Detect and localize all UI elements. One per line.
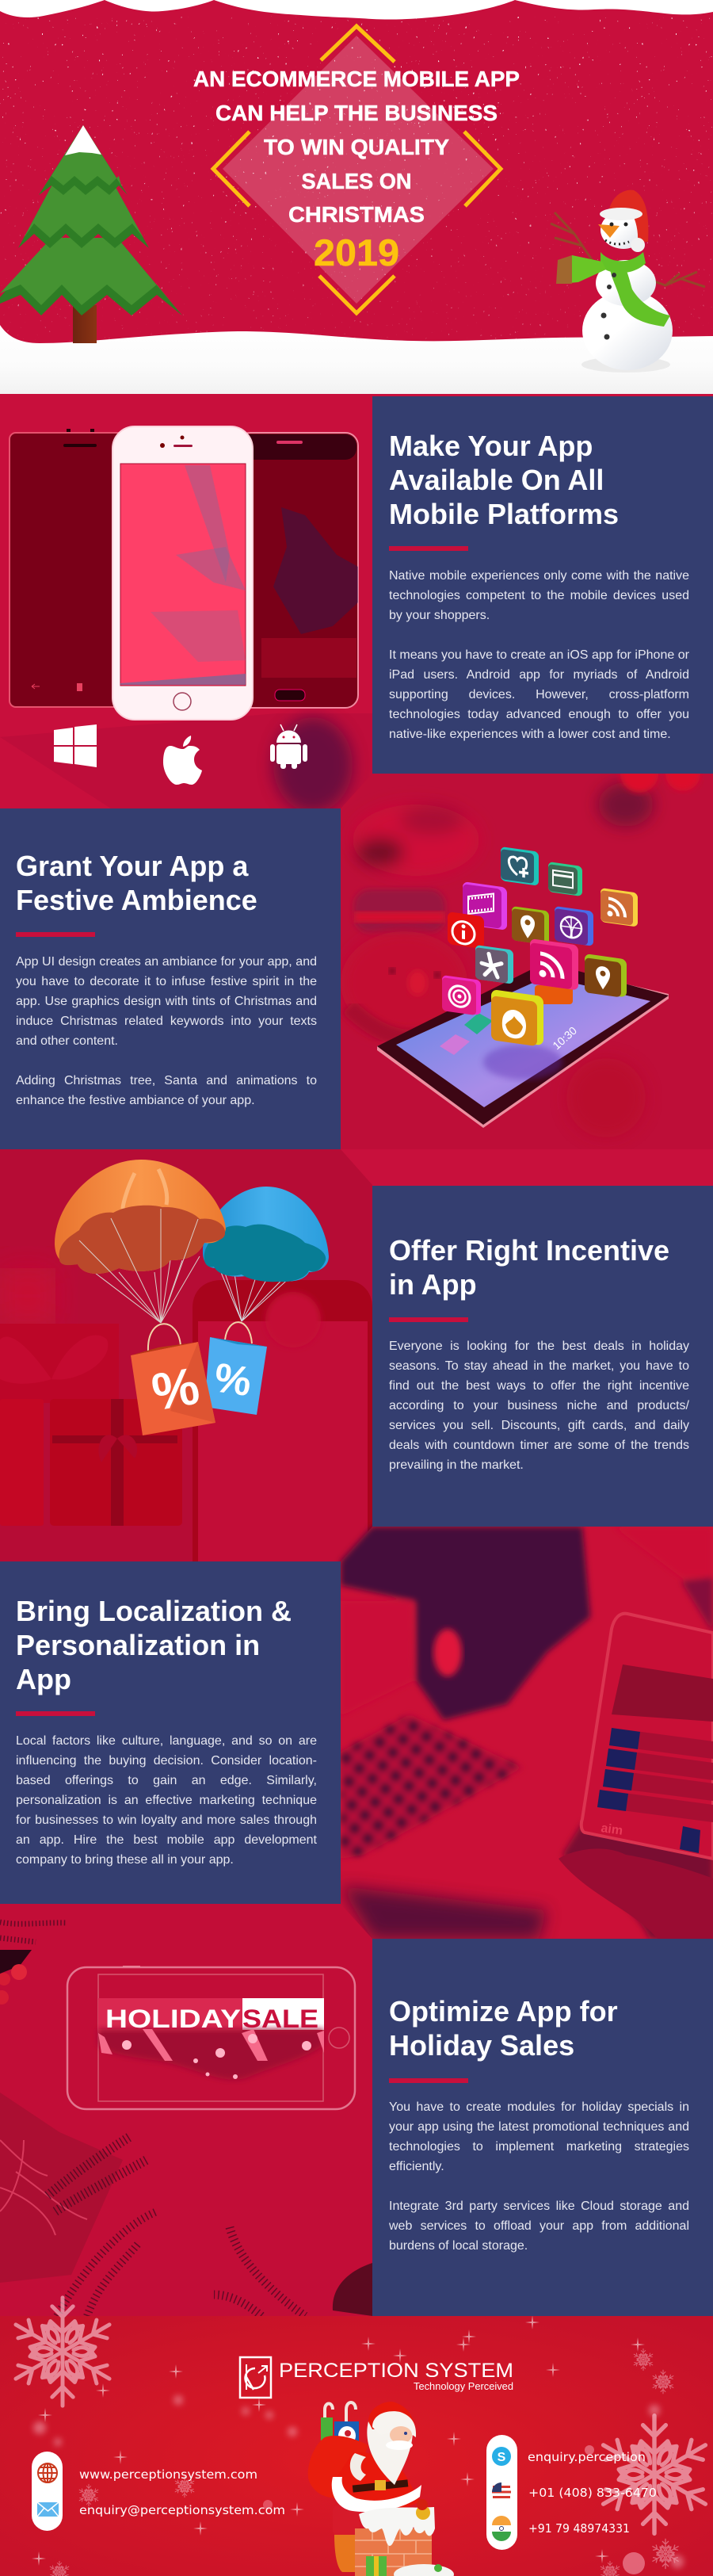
face [390, 2426, 412, 2444]
title: CAN HELP THE BUSINESS [215, 101, 498, 125]
heading: Mobile Platforms [389, 498, 619, 530]
body text: deals with countdown timer are some of the trends [389, 1439, 689, 1452]
snow drift top [0, 0, 713, 20]
icon: snowman [551, 190, 705, 373]
accent bar [16, 932, 95, 937]
body text: You have to create modules for holiday specials in [389, 2100, 689, 2114]
panel: offer right incentive [372, 1186, 713, 1527]
contact text: skype and phones: +01 (408) 833-6470 [528, 2486, 657, 2500]
chimney snow [359, 2507, 435, 2546]
heading: Personalization in [16, 1629, 260, 1661]
background phone [193, 1280, 372, 1561]
title [193, 67, 520, 273]
body text: iPad users. Android app for myriads of Android [389, 668, 689, 682]
body text: Adding Christmas tree, Santa and animations to [16, 1074, 317, 1087]
icon: mountain [491, 989, 543, 1047]
heading: Bring Localization & [16, 1595, 292, 1627]
bottom gift [366, 2556, 387, 2576]
panel: bring localization and personalization [0, 1561, 341, 1904]
icon: snowflake right [595, 2416, 713, 2533]
icon: pin brown [585, 954, 627, 998]
contact text: web and mail [79, 2467, 285, 2517]
contact text: skype and phones [528, 2450, 657, 2536]
tablet: 10:30 [550, 1024, 579, 1052]
leg and boot [333, 2505, 360, 2536]
phone showing holiday sale: SALE [242, 2005, 318, 2033]
shopping bag: blue [204, 1322, 267, 1415]
icon: windows logo [54, 724, 97, 767]
fir branches [0, 1922, 305, 2316]
phone showing holiday sale [67, 1966, 355, 2109]
body text: technologies to implement marketing strategies [389, 2140, 689, 2154]
section 2 image background [341, 755, 713, 1186]
body text: based offerings to gain an edge. Similarly, [16, 1774, 317, 1787]
heading: Available On All [389, 464, 604, 496]
icon: heart [501, 847, 539, 886]
icon: yelp [475, 945, 513, 984]
body text: efficiently. [389, 2160, 444, 2173]
body text: for businesses to win loyalty and more sales through [16, 1814, 317, 1827]
gifts [325, 2402, 356, 2425]
accent bar [389, 2078, 468, 2083]
icon: card [548, 862, 582, 896]
right phone: android [238, 433, 358, 708]
body text: you have to decorate it to infuse festive spirit in the [16, 975, 317, 988]
body text: Local factors like culture, language, and so on are [16, 1734, 317, 1748]
body text: native-like experiences with a lower cost and time. [389, 728, 671, 741]
body text: services you sell. Discounts, gift cards, and daily [389, 1419, 689, 1432]
icon: pin olive [512, 906, 549, 946]
beard [367, 2421, 413, 2485]
parachute: blue [203, 1187, 329, 1321]
body text: burdens of local storage. [389, 2239, 528, 2253]
shopping bag: blue: % [212, 1355, 254, 1405]
accent bar [389, 1317, 468, 1322]
title: SALES ON [301, 169, 412, 193]
contact text: skype and phones: +91 79 48974331 [528, 2521, 630, 2536]
logo: Technology Perceived [414, 2380, 513, 2392]
body text: personalization is an effective marketing technique [16, 1794, 317, 1807]
body text: technologies today advanced enough to offer you [389, 708, 689, 721]
heading: Holiday Sales [389, 2029, 574, 2062]
section 3 image [0, 1149, 713, 1561]
body text: by your shoppers. [389, 609, 490, 622]
heading: App [16, 1663, 71, 1695]
hero background [0, 16, 713, 341]
bell [416, 2505, 430, 2520]
body text [16, 1734, 317, 1867]
body text: seasons. To stay ahead in the market, you have to [389, 1359, 689, 1373]
body text: prevailing in the market. [389, 1458, 524, 1472]
app icons [442, 847, 638, 1047]
heading: Make Your App [389, 430, 593, 462]
logo: PERCEPTION SYSTEM [279, 2360, 513, 2382]
icon: skype: S [498, 2451, 506, 2464]
tablet [377, 962, 669, 1128]
parachute: orange [55, 1160, 226, 1323]
contact text: web and mail: www.perceptionsystem.com [79, 2467, 257, 2482]
icon: mail [37, 2502, 59, 2517]
body text: Integrate 3rd party services like Cloud storage and [389, 2200, 689, 2213]
icon: skype [492, 2447, 511, 2466]
body text: your app using the latest promotional techniques and [389, 2120, 689, 2134]
hat [368, 2402, 415, 2429]
photo: hand holding phone [559, 1614, 713, 1939]
icon: info [448, 912, 484, 949]
body text: influencing the buying decision. Consider location- [16, 1754, 317, 1768]
suit [335, 2452, 420, 2510]
heading: Optimize App for [389, 1995, 618, 2028]
icon: india flag [492, 2516, 511, 2541]
icon: christmas tree [0, 125, 182, 343]
photo: hand holding phone: aim [600, 1821, 623, 1838]
icon: apple logo [163, 736, 202, 785]
snow ground [0, 325, 713, 394]
leaf and berries [0, 1950, 372, 2316]
body text [389, 1340, 689, 1472]
body text: company to bring these all in your app. [16, 1853, 234, 1867]
icon: target [442, 975, 481, 1016]
body text: an app. Hire the best mobile app development [16, 1833, 317, 1847]
contact pill: skype and phones [486, 2435, 517, 2550]
body text [389, 569, 689, 741]
body text: enhance the festive ambiance of your app. [16, 1094, 255, 1107]
icon: android logo [270, 724, 307, 769]
body text: induce Christmas related keywords into your texts [16, 1015, 317, 1028]
icon: snowflake top left [8, 2298, 117, 2406]
phone showing holiday sale: HOLIDAY [105, 2005, 241, 2033]
section 4 image [341, 1527, 713, 1939]
heading [16, 850, 257, 916]
title: TO WIN QUALITY [264, 135, 449, 159]
title: AN ECOMMERCE MOBILE APP [193, 67, 520, 91]
body text [16, 955, 317, 1107]
icon: dribbble [555, 906, 593, 946]
body text: Native mobile experiences only come with the native [389, 569, 689, 583]
small snowflakes [48, 2349, 681, 2576]
body text: according to your business niche and products/ [389, 1399, 689, 1412]
left phone: windows [10, 429, 128, 707]
heading [389, 1234, 669, 1301]
heading [16, 1595, 292, 1695]
accent bar [16, 1711, 95, 1716]
icon: small orange [535, 985, 573, 1004]
contact text: skype and phones: enquiry.perception [528, 2450, 646, 2464]
body text: app. Use graphics design with tints of Christmas and [16, 995, 317, 1008]
accent bar [389, 546, 468, 551]
body text: App UI design creates an ambiance for your app, and [16, 955, 317, 969]
heading: Festive Ambience [16, 884, 257, 916]
panel: make your app available [372, 396, 713, 774]
heading [389, 430, 619, 530]
heading: Offer Right Incentive [389, 1234, 669, 1267]
panel: grant your app a festive ambience [0, 808, 341, 1149]
section 5 image [0, 1904, 372, 2316]
body text: web services to offload your app from additional [389, 2219, 689, 2233]
body text [389, 2100, 689, 2253]
gift boxes [0, 1324, 182, 1526]
illustration: santa on chimney [308, 2402, 454, 2576]
logo [240, 2357, 513, 2398]
contact text: web and mail: enquiry@perceptionsystem.com [79, 2503, 285, 2517]
icon: us flag [492, 2482, 511, 2501]
shopping bag: orange [131, 1324, 215, 1435]
chimney [355, 2528, 432, 2576]
icon: film [463, 881, 507, 931]
shopping bag: orange: % [147, 1356, 204, 1422]
footer background [0, 2315, 713, 2576]
body text: Everyone is looking for the best deals in holiday [389, 1340, 689, 1353]
body text: It means you have to create an iOS app for iPhone or [389, 648, 689, 662]
body text: technologies competent to the mobile devices used [389, 589, 689, 602]
section 1 image background [0, 396, 372, 812]
icon: rss pink [530, 938, 578, 991]
heading: in App [389, 1268, 477, 1301]
title: 2019 [314, 231, 399, 273]
body text: find out the best ways to offer the right incentive [389, 1379, 689, 1393]
sack [308, 2436, 368, 2498]
heading: Grant Your App a [16, 850, 248, 882]
panel: optimize app for holiday sales [372, 1939, 713, 2316]
contact pill: web and mail [32, 2452, 63, 2531]
center phone: iphone [112, 426, 253, 720]
body text: and other content. [16, 1034, 118, 1048]
diamond title backdrop [213, 26, 501, 313]
icon: globe [38, 2463, 57, 2482]
heading [389, 1995, 618, 2062]
body text: supporting devices. However, cross-platform [389, 688, 689, 701]
title: CHRISTMAS [288, 202, 425, 227]
icon: rss orange [601, 888, 638, 927]
